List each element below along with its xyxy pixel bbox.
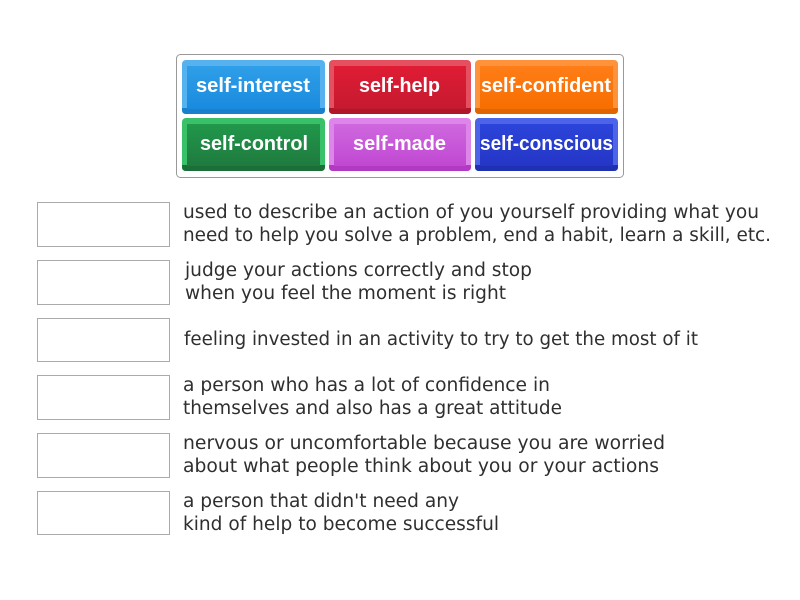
definition 2: [184, 260, 532, 304]
definition 2: when you feel the moment is right: [185, 283, 506, 304]
definition 5: nervous or uncomfortable because you are worried: [183, 433, 665, 454]
button: self-control: self-control: [200, 132, 308, 155]
button: self-help: self-help: [359, 74, 440, 97]
definition 3: feeling invested in an activity to try to get the most of it: [184, 329, 698, 350]
definition 1: need to help you solve a problem, end a habit, learn a skill, etc.: [183, 225, 771, 246]
button: self-interest: [182, 60, 325, 114]
answer box 4: [38, 376, 170, 420]
button: self-conscious: [475, 118, 618, 171]
answer box 3: [38, 318, 170, 362]
button: self-made: [329, 118, 471, 171]
answer box 5: [38, 434, 170, 478]
button: self-confident: self-confident: [481, 74, 611, 97]
definition 6: kind of help to become successful: [183, 514, 499, 535]
answer box 6: [38, 492, 170, 534]
answer box 1: [38, 202, 170, 246]
button: self-interest: self-interest: [196, 74, 310, 97]
definition 6: a person that didn't need any: [183, 491, 459, 512]
button: self-made: self-made: [353, 132, 446, 155]
definition 2: judge your actions correctly and stop: [184, 260, 532, 281]
definition 6: [183, 491, 499, 535]
button: self-control: [182, 118, 325, 171]
definition 1: [183, 202, 771, 246]
answer box 2: [38, 260, 170, 304]
definition 4: themselves and also has a great attitude: [183, 398, 562, 419]
definition 1: used to describe an action of you yourself providing what you: [183, 202, 759, 223]
panel: word bank: [176, 54, 624, 178]
definition 5: [183, 433, 665, 477]
button: self-help: [329, 60, 471, 114]
definition 4: a person who has a lot of confidence in: [183, 375, 550, 396]
definition 4: [183, 375, 562, 419]
button: self-conscious: self-conscious: [480, 132, 613, 155]
button: self-confident: [475, 60, 618, 114]
definition 5: about what people think about you or your actions: [183, 456, 659, 477]
